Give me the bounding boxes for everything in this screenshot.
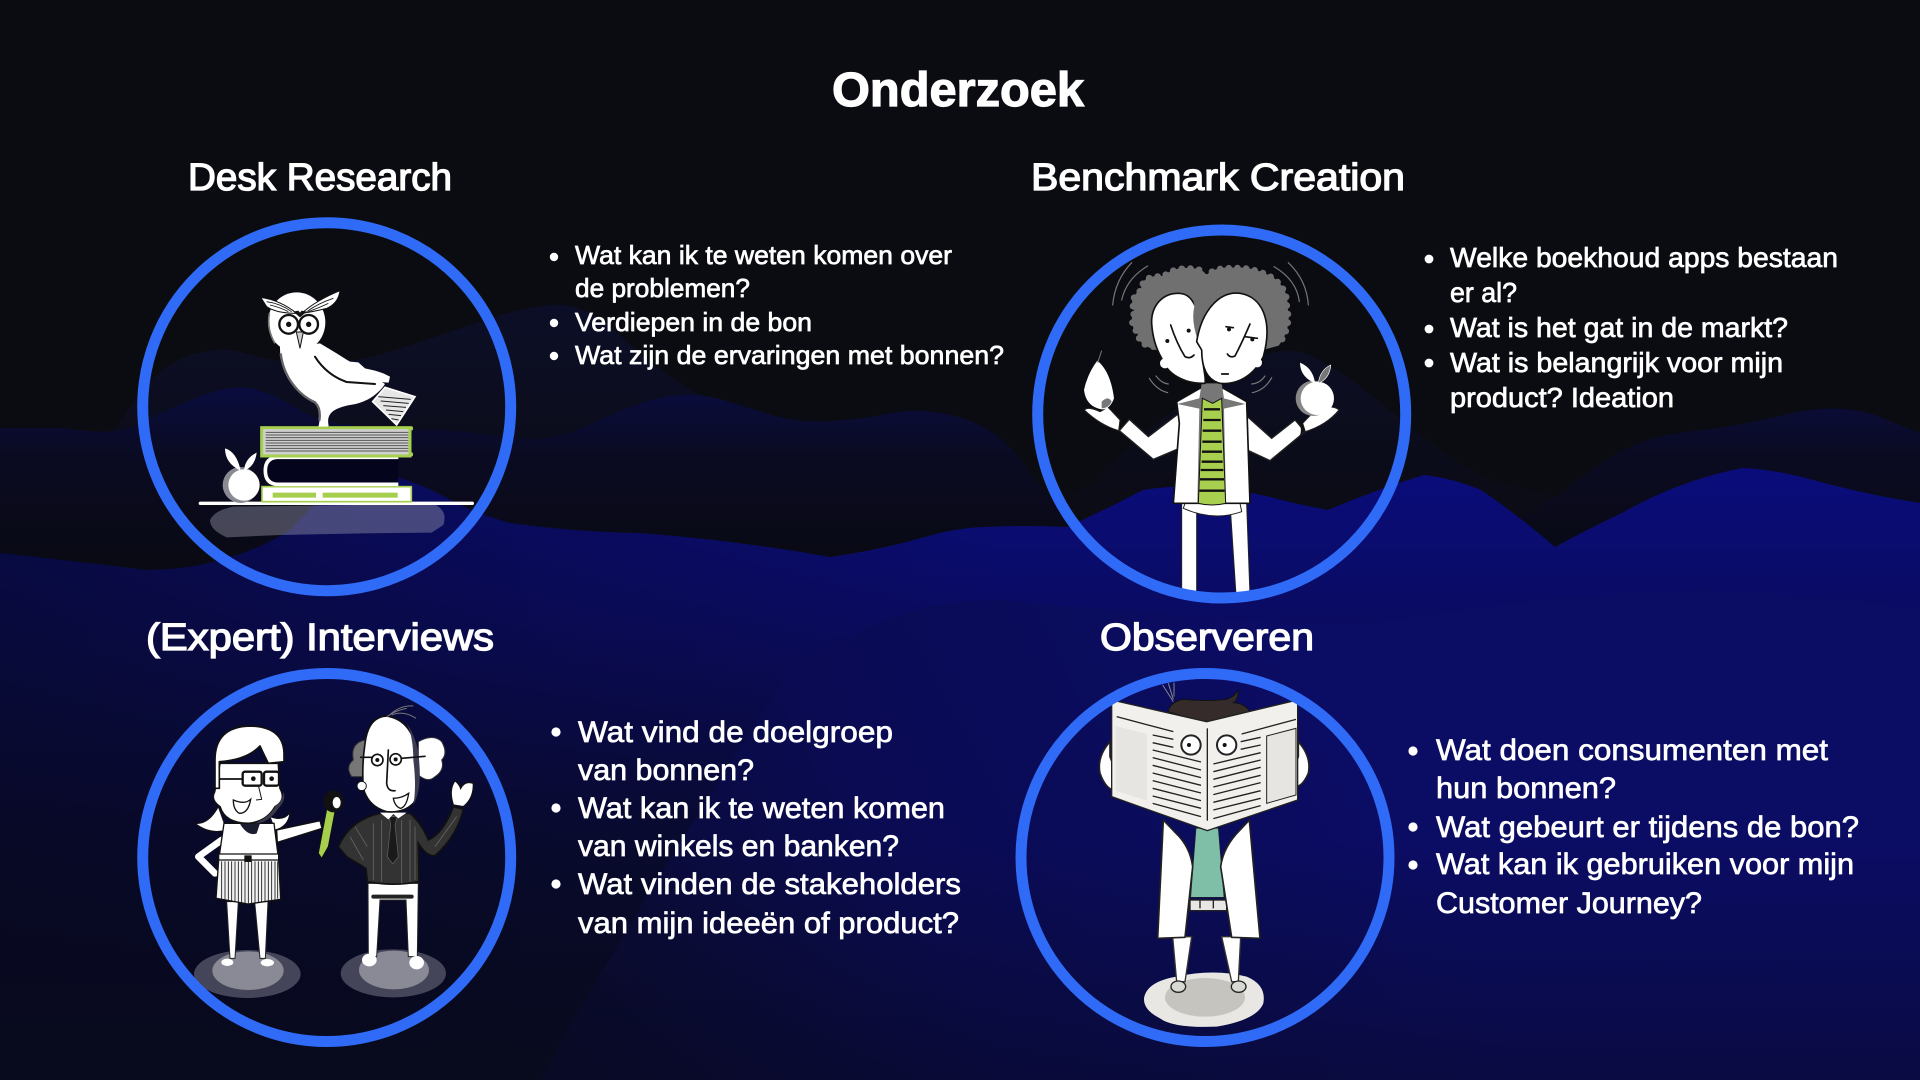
lab coat [1158, 820, 1260, 938]
hands [1099, 742, 1309, 790]
question list: Observeren: Wat kan ik gebruiken voor mijn [1436, 848, 1854, 881]
hair flicks [195, 807, 227, 831]
left arm [198, 840, 222, 873]
middle book [265, 457, 398, 484]
pear [1084, 351, 1114, 409]
shirt and shorts [1190, 828, 1227, 911]
question list: Desk Research: Verdiepen in de bon [575, 307, 812, 337]
skirt [216, 855, 281, 904]
question list: Benchmark Creation: Wat is belangrijk voor mijn [1450, 347, 1783, 378]
floor shadows [194, 949, 446, 998]
arms and hands [1084, 404, 1339, 461]
ring: Observeren [1021, 674, 1389, 1042]
question list: (Expert) Interviews [551, 716, 961, 940]
lapels and neck [1177, 383, 1245, 503]
head and hair [213, 763, 282, 823]
question list: Observeren [1408, 734, 1859, 920]
question list: Desk Research: de problemen? [575, 273, 750, 303]
wing with scalloped edge [317, 348, 390, 384]
heading: (Expert) Interviews: (Expert) Interviews [146, 617, 494, 659]
question list: Desk Research: Wat kan ik te weten komen over [575, 240, 952, 270]
owl [261, 291, 415, 427]
question list: Observeren: Wat doen consumenten met [1436, 734, 1829, 767]
shelf [199, 502, 474, 505]
striped shirt [1198, 398, 1226, 505]
newspaper [1112, 700, 1298, 831]
panel: Desk Research [143, 157, 1004, 591]
question list: Observeren: Customer Journey? [1436, 887, 1702, 920]
question list: Desk Research [550, 240, 1004, 370]
legs [227, 902, 238, 958]
question list: Benchmark Creation [1425, 242, 1838, 413]
torso [219, 823, 279, 860]
question list: (Expert) Interviews: van winkels en banken? [578, 830, 899, 863]
question list: (Expert) Interviews: Wat vinden de stakeholders [578, 868, 961, 901]
top green book [262, 426, 413, 456]
apple [223, 448, 260, 503]
ring: Desk Research [143, 223, 511, 591]
shadow under shelf [210, 504, 445, 537]
question list: Observeren: Wat gebeurt er tijdens de bon? [1436, 811, 1859, 844]
legs [1171, 937, 1246, 992]
front head [1194, 268, 1288, 384]
heading: Desk Research: Desk Research [188, 157, 452, 199]
ring: Benchmark Creation [1038, 230, 1406, 598]
coat [1173, 388, 1250, 503]
floor shadow [1144, 972, 1264, 1027]
question list: Benchmark Creation: Wat is het gat in de markt? [1450, 312, 1788, 343]
back head [1132, 268, 1209, 383]
right arm [277, 821, 322, 842]
question list: Desk Research: Wat zijn de ervaringen met bonnen? [575, 340, 1004, 370]
illustration: two-headed scientist holding pear and apple [1084, 263, 1339, 595]
tail [373, 387, 415, 425]
head [268, 292, 325, 352]
motion lines [1113, 263, 1308, 393]
question list: (Expert) Interviews: van mijn ideeën of product? [578, 907, 959, 940]
illustration: owl on books with apple [199, 291, 474, 537]
body [280, 343, 385, 426]
question list: Benchmark Creation: Welke boekhoud apps bestaan [1450, 242, 1838, 273]
microphone [318, 790, 343, 858]
heading: Benchmark Creation: Benchmark Creation [1031, 157, 1405, 199]
question list: (Expert) Interviews: van bonnen? [578, 754, 754, 787]
apple [1296, 363, 1334, 416]
professor [338, 706, 473, 969]
illustration: woman interviewing professor with microphone [194, 706, 473, 998]
panel: (Expert) Interviews [143, 617, 961, 1042]
title: Onderzoek [832, 64, 1084, 117]
legs [1182, 503, 1250, 595]
ring: (Expert) Interviews [143, 674, 511, 1042]
bottom book [262, 487, 411, 502]
heading: Observeren: Observeren [1100, 617, 1314, 659]
illustration: scientist reading newspaper [1099, 683, 1309, 1027]
question list: Benchmark Creation: product? Ideation [1450, 382, 1674, 413]
question list: (Expert) Interviews: Wat kan ik te weten komen [578, 792, 945, 825]
question list: (Expert) Interviews: Wat vind de doelgroep [578, 716, 893, 749]
panel: Observeren [1021, 617, 1859, 1042]
panel: Benchmark Creation [1031, 157, 1838, 598]
question list: Observeren: hun bonnen? [1436, 772, 1616, 805]
woman [195, 726, 322, 966]
question list: Benchmark Creation: er al? [1450, 277, 1517, 308]
hair [1163, 683, 1251, 723]
